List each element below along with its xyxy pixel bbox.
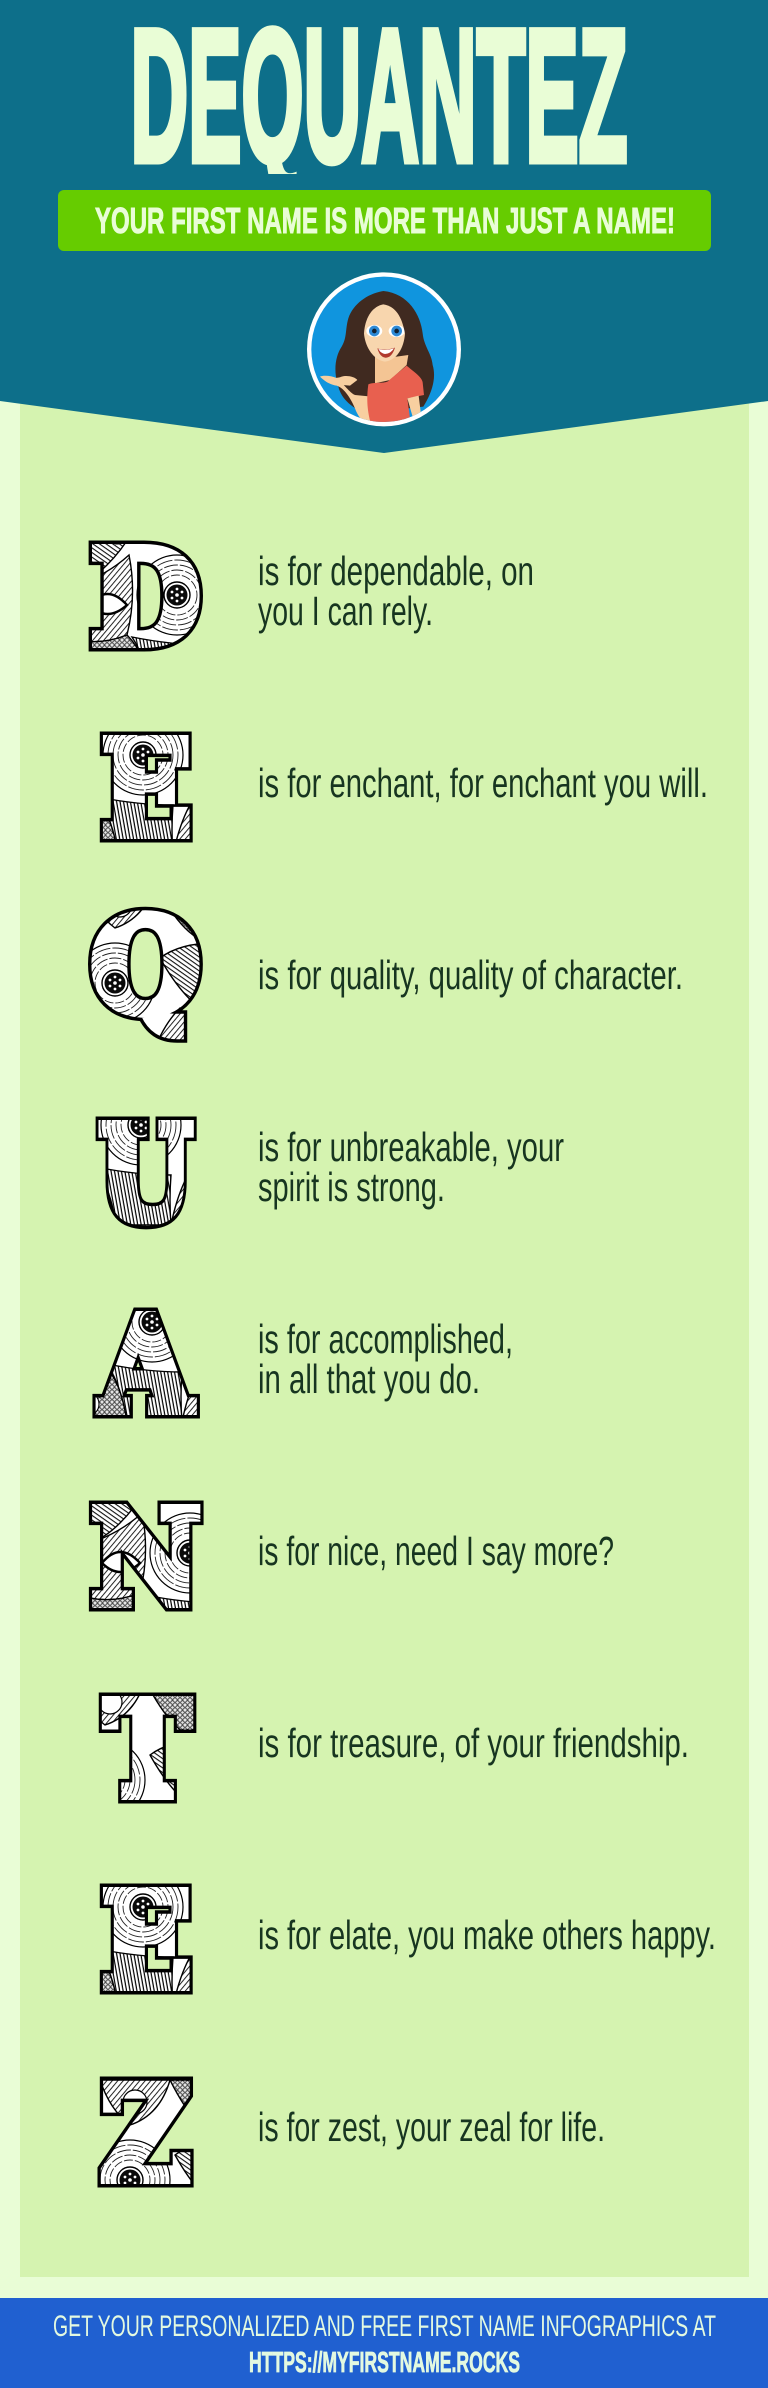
footer [0,2298,768,2388]
text: U [258,1124,564,1210]
row: U [99,1099,564,1250]
text: Z: is for zest, your zeal for life. [258,2104,605,2150]
letter N: N [92,1483,200,1634]
header banner [0,0,768,453]
icon: woman avatar in circle [307,272,461,426]
letter Q: Q [91,891,200,1042]
letter Q: Q [91,891,200,1042]
letter A: A [99,1290,193,1441]
letter E: E [102,714,191,865]
row: E [102,714,708,865]
text: D: you I can rely. [258,588,433,634]
letter E: E [102,714,191,865]
text: D: is for dependable, on [258,548,534,594]
footer url: HTTPS://MYFIRSTNAME.ROCKS [249,2347,520,2379]
text: U: is for unbreakable, your [258,1124,564,1170]
letter T: T [105,1675,190,1826]
letter D: D [91,523,200,674]
row: T [105,1675,689,1826]
letter U: U [99,1099,192,1250]
inner content panel [20,380,749,2277]
text: N: is for nice, need I say more? [258,1528,614,1574]
letter D: D [91,523,200,674]
letter Z: Z [101,2059,190,2210]
text: D [258,548,534,634]
letter Z: Z [101,2059,190,2210]
letter A: A [99,1290,193,1441]
letter T: T [105,1675,190,1826]
row: Q [91,891,683,1042]
text: A [258,1316,513,1402]
letter E second: E [102,1866,191,2017]
letter U: U [99,1099,192,1250]
letter N: N [92,1483,200,1634]
text: A: in all that you do. [258,1356,480,1402]
text: A: is for accomplished, [258,1316,513,1362]
row: E second [102,1866,716,2017]
tagline bar [58,190,711,251]
row: D [91,523,534,674]
row: Z [101,2059,605,2210]
letter E second: E [102,1866,191,2017]
row: N [92,1483,614,1634]
row: A [99,1290,513,1441]
text: U: spirit is strong. [258,1164,445,1210]
